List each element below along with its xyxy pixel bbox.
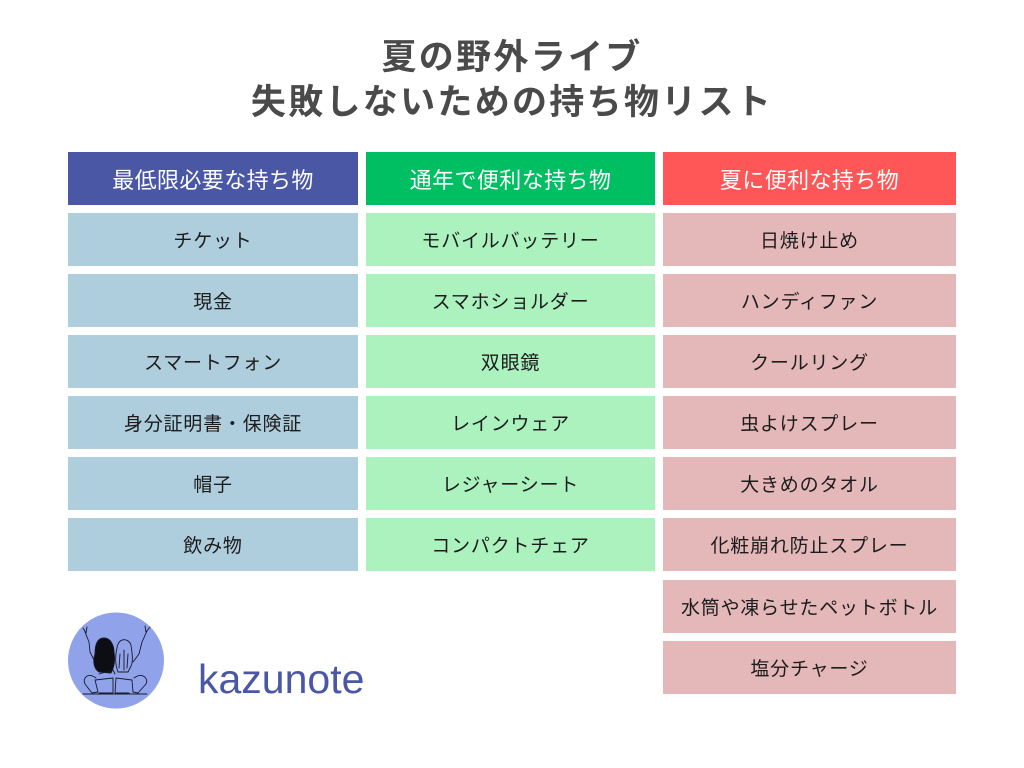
item: handy fan <box>663 274 956 327</box>
title: 失敗しないための持ち物リスト <box>251 83 773 122</box>
item: water bottle <box>663 580 956 633</box>
item: cooling ring <box>663 335 956 388</box>
item: mobile battery: モバイルバッテリー <box>421 231 600 252</box>
item: water bottle: 水筒や凍らせたペットボトル <box>681 598 938 619</box>
item: cooling ring: クールリング <box>750 353 869 374</box>
item: ticket: チケット <box>173 231 253 252</box>
item: handy fan: ハンディファン <box>741 292 878 313</box>
item: binoculars <box>366 335 655 388</box>
item: sunscreen <box>663 213 956 266</box>
item: large towel <box>663 457 956 510</box>
item: ID and insurance card: 身分証明書・保険証 <box>124 414 302 435</box>
panel: minimum essentials <box>68 152 358 571</box>
item: picnic sheet: レジャーシート <box>442 475 579 496</box>
item: rainwear: レインウェア <box>451 414 570 435</box>
heading: useful in summer <box>663 152 956 205</box>
item: salt charge: 塩分チャージ <box>750 659 869 680</box>
item: ticket <box>68 213 358 266</box>
item: rainwear <box>366 396 655 449</box>
item: drinks <box>68 518 358 571</box>
item: cash <box>68 274 358 327</box>
item: hat <box>68 457 358 510</box>
item: compact chair: コンパクトチェア <box>431 536 590 557</box>
item: picnic sheet <box>366 457 655 510</box>
item: hat: 帽子 <box>193 475 233 496</box>
title: 夏の野外ライブ <box>381 38 643 77</box>
item: large towel: 大きめのタオル <box>740 475 879 496</box>
item: phone shoulder strap <box>366 274 655 327</box>
item: phone shoulder strap: スマホショルダー <box>432 292 589 313</box>
logo text: kazunote <box>198 656 364 702</box>
item: cash: 現金 <box>193 292 233 313</box>
heading: minimum essentials: 最低限必要な持ち物 <box>112 168 314 192</box>
item: makeup setting spray: 化粧崩れ防止スプレー <box>710 536 908 557</box>
item: sunscreen: 日焼け止め <box>760 231 859 252</box>
heading: useful all year <box>366 152 655 205</box>
item: ID and insurance card <box>68 396 358 449</box>
icon: two friends seated with raised arms <box>68 612 164 708</box>
item: smartphone <box>68 335 358 388</box>
heading: useful in summer: 夏に便利な持ち物 <box>720 168 899 192</box>
panel: useful all year <box>366 152 655 571</box>
item: salt charge <box>663 641 956 694</box>
panel: useful in summer <box>663 152 956 694</box>
item: insect repellent <box>663 396 956 449</box>
item: makeup setting spray <box>663 518 956 571</box>
item: binoculars: 双眼鏡 <box>481 353 540 374</box>
heading: useful all year: 通年で便利な持ち物 <box>410 168 611 192</box>
item: smartphone: スマートフォン <box>144 353 282 374</box>
item: mobile battery <box>366 213 655 266</box>
item: drinks: 飲み物 <box>183 536 243 557</box>
item: insect repellent: 虫よけスプレー <box>740 414 879 435</box>
item: compact chair <box>366 518 655 571</box>
title <box>251 38 773 122</box>
heading: minimum essentials <box>68 152 358 205</box>
